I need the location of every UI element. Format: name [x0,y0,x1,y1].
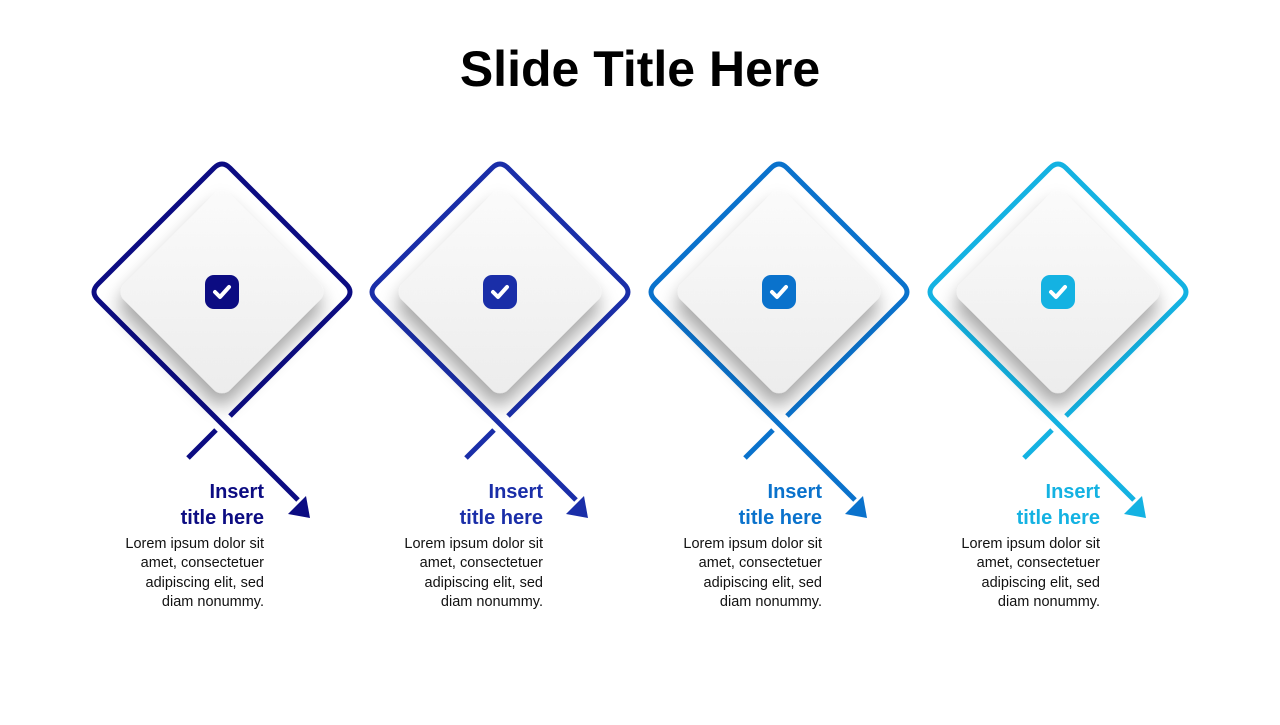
step 1 text: diam nonummy. [162,594,264,610]
step 3 [651,164,907,518]
step 3 text: Lorem ipsum dolor sit [683,536,822,552]
icon: check [483,275,517,309]
arrowhead [845,496,867,518]
arrowhead [566,496,588,518]
icon: check [205,275,239,309]
step 3 text: Insert [768,481,822,503]
step 2 text: Lorem ipsum dolor sit [404,536,543,552]
icon: check [1041,275,1075,309]
step 3 text: diam nonummy. [720,594,822,610]
step 3 text: adipiscing elit, sed [704,575,822,591]
step 4 text: diam nonummy. [998,594,1100,610]
step 2 text: Insert [489,481,543,503]
step 1 text: adipiscing elit, sed [146,575,264,591]
card [394,186,606,398]
step 4 text: Insert [1046,481,1100,503]
step 2 text: amet, consectetuer [420,555,543,571]
diamond outline [651,164,907,500]
step 2 text: title here [460,507,543,529]
card [952,186,1164,398]
step 4 text: title here [1017,507,1100,529]
card [116,186,328,398]
step 2 text: adipiscing elit, sed [424,575,543,591]
step 1 text: Lorem ipsum dolor sit [125,536,264,552]
step 1 text: amet, consectetuer [141,555,264,571]
diamond outline [930,164,1186,500]
step 1 text: title here [181,507,264,529]
step 2 text: diam nonummy. [441,594,543,610]
step 1 [94,164,350,518]
step 4 text [961,481,1100,610]
arrowhead [1124,496,1146,518]
step 3 text: amet, consectetuer [699,555,822,571]
icon: check [762,275,796,309]
card [673,186,885,398]
title: Slide Title Here [460,41,820,97]
step 4 text: Lorem ipsum dolor sit [961,536,1100,552]
step 1 text: Insert [210,481,264,503]
step 3 text: title here [739,507,822,529]
arrowhead [288,496,310,518]
step 4 text: adipiscing elit, sed [982,575,1100,591]
diamond outline [372,164,628,500]
diamond outline [94,164,350,500]
step 2 text [404,481,543,610]
step 4 [930,164,1186,518]
step 2 [372,164,628,518]
step 1 text [125,481,264,610]
step 3 text [683,481,822,610]
step 4 text: amet, consectetuer [977,555,1100,571]
